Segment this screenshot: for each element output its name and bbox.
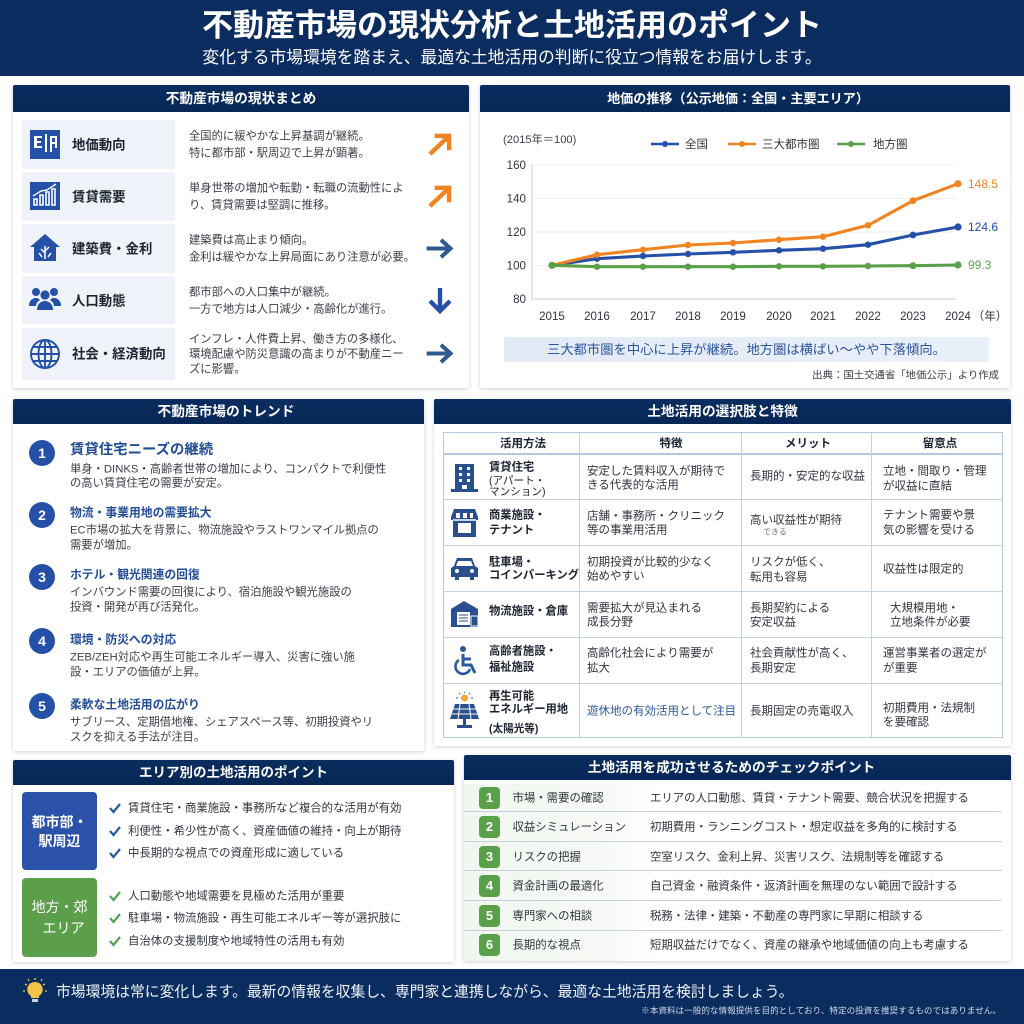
description	[189, 130, 370, 160]
source note: 出典：国土交通省「地価公示」より作成	[812, 370, 999, 381]
label: 賃貸需要	[72, 189, 126, 204]
description	[189, 286, 392, 316]
panel heading: points by area	[13, 760, 454, 785]
row: parking: 収益性は限定的	[883, 564, 964, 576]
line chart: 2016	[584, 310, 610, 323]
panel: market summary	[13, 85, 469, 388]
row: renewable energy: エネルギー用地	[489, 704, 568, 716]
checkpoint 4: 自己資金・融資条件・返済計画を無理のない範囲で設計する	[650, 881, 958, 893]
row: elderly care: が重要	[883, 663, 918, 675]
description: 単身世帯の増加や転勤・転職の流動性によ	[189, 183, 404, 195]
header banner	[0, 0, 1024, 76]
check list: regional: 駐車場・物流施設・再生可能エネルギー等が選択肢に	[128, 913, 401, 925]
line chart: 2018	[675, 310, 701, 323]
trend 5: スクを抑える手法が注目。	[70, 732, 205, 744]
check list: urban: 中長期的な視点での資産形成に適している	[128, 848, 344, 860]
line chart: 124.6	[968, 220, 998, 234]
row: rental housing: マンション)	[489, 486, 546, 498]
row: rental housing	[444, 455, 1002, 500]
checkpoint 5	[464, 901, 1002, 931]
label box: regional	[22, 878, 97, 957]
row: parking: 始めやすい	[587, 571, 644, 583]
description: インフレ・人件費上昇、働き方の多様化、	[189, 334, 403, 346]
row: renewable energy: を要確認	[883, 717, 929, 729]
checkpoint 4: 4	[486, 878, 493, 893]
checkpoint 1: エリアの人口動態、賃貸・テナント需要、競合状況を把握する	[650, 793, 969, 805]
row: commercial: テナント	[489, 525, 534, 537]
legend	[651, 137, 908, 151]
description	[189, 182, 404, 212]
checkpoint 1	[464, 784, 1002, 812]
group: urban	[22, 792, 401, 870]
description: 特に都市部・駅周辺で上昇が顕著。	[189, 148, 370, 160]
checkpoint 2: 2	[486, 819, 493, 834]
trend 4	[29, 628, 355, 679]
panel heading: market trends: 不動産市場のトレンド	[158, 404, 294, 419]
row: elderly care: 高齢化社会により需要が	[587, 648, 713, 660]
trend 3: 3	[38, 569, 46, 585]
panel heading: land price trend	[480, 85, 1010, 112]
line chart: 2015	[539, 310, 565, 323]
panel heading: points by area: エリア別の土地活用のポイント	[139, 765, 328, 780]
series: regional	[548, 261, 962, 270]
icon: warehouse	[451, 601, 478, 627]
table header row: 留意点	[923, 438, 957, 450]
label: 建築費・金利	[72, 241, 152, 256]
checkpoint 1: 市場・需要の確認	[512, 793, 604, 805]
description: 環境配慮や防災意識の高まりが不動産ニー	[189, 349, 404, 361]
checkpoint 6	[464, 931, 1002, 961]
label: 社会・経済動向	[72, 346, 166, 361]
arrow: up right	[428, 134, 452, 156]
trend 3: 投資・開発が再び活発化。	[70, 602, 206, 614]
trend 1	[29, 440, 386, 490]
checkpoint 2: 収益シミュレーション	[512, 822, 626, 834]
callout: chart summary	[504, 337, 989, 362]
subtitle: 変化する市場環境を踏まえ、最適な土地活用の判断に役立つ情報をお届けします。	[202, 48, 822, 67]
row: population	[22, 276, 452, 324]
trend 2	[29, 502, 379, 552]
table header row	[444, 433, 1002, 455]
checkpoint 3: 空室リスク、金利上昇、災害リスク、法規制等を確認する	[650, 852, 944, 864]
check list: regional: 自治体の支援制度や地域特性の活用も有効	[128, 936, 344, 948]
trend 3	[29, 564, 352, 614]
checkpoint 5: 専門家への相談	[512, 911, 592, 923]
panel heading: success checkpoints: 土地活用を成功させるためのチェックポイント	[588, 760, 875, 775]
line chart: 160	[507, 159, 526, 172]
check list: regional	[109, 890, 401, 948]
check list: urban	[109, 802, 401, 860]
check list: urban: 利便性・希少性が高く、資産価値の維持・向上が期待	[128, 826, 401, 838]
checkpoint 6: 6	[486, 937, 493, 952]
row: commercial: 気の影響を受ける	[883, 525, 975, 537]
legend: 三大都市圏	[762, 137, 820, 151]
trend 2: 2	[38, 507, 46, 523]
footer message: 市場環境は常に変化します。最新の情報を収集し、専門家と連携しながら、最適な土地活用を検討しましょう。	[56, 984, 793, 1000]
checkpoint 3	[464, 842, 1002, 871]
row: logistics: 長期契約による	[750, 603, 830, 615]
table header row: 活用方法	[500, 438, 546, 450]
row: parking: コインパーキング	[489, 570, 579, 582]
check list: urban: 賃貸住宅・商業施設・事務所など複合的な活用が有効	[128, 803, 401, 815]
panel heading: market trends	[13, 399, 424, 424]
panel: market trends	[13, 399, 424, 751]
line chart: （年）	[973, 309, 1007, 323]
icon: storefront	[451, 509, 478, 537]
trend 2: 物流・事業用地の需要拡大	[70, 505, 212, 519]
row: commercial: テナント需要や景	[883, 510, 975, 522]
label: 地価動向	[72, 137, 126, 152]
line chart: 2019	[720, 310, 746, 323]
panel heading: market summary	[13, 85, 469, 112]
table header row: 特徴	[660, 438, 682, 450]
checkpoint 4: 資金計画の最適化	[512, 881, 604, 893]
row: land price	[22, 120, 452, 169]
row: logistics: 安定収益	[750, 617, 796, 629]
footer banner	[0, 969, 1024, 1024]
table header row: メリット	[785, 438, 831, 450]
arrow: up right	[428, 186, 452, 208]
panel heading: land price trend: 地価の推移（公示地価：全国・主要エリア）	[607, 91, 869, 106]
line chart	[503, 132, 1007, 323]
row: parking	[444, 546, 1002, 592]
panel heading: success checkpoints	[464, 755, 1011, 780]
trend 5: 5	[38, 698, 46, 714]
row: logistics: 物流施設・倉庫	[489, 606, 568, 618]
check list: regional: 人口動態や地域需要を見極めた活用が重要	[128, 891, 344, 903]
icon: light bulb	[23, 978, 47, 1002]
legend: 地方圏	[873, 137, 908, 151]
description: 一方で地方は人口減少・高齢化が進行。	[189, 304, 392, 316]
checkpoint 6: 短期収益だけでなく、資産の継承や地域価値の向上も考慮する	[650, 940, 969, 952]
row: parking: 初期投資が比較的少なく	[587, 557, 714, 569]
icon: people	[29, 288, 61, 310]
row: logistics: 立地条件が必要	[890, 617, 970, 629]
panel heading: land use options: 土地活用の選択肢と特徴	[647, 404, 798, 419]
panel heading: land use options	[434, 399, 1011, 424]
line chart: 140	[507, 192, 526, 206]
line chart: 2022	[855, 310, 881, 323]
trend 4: ZEB/ZEH対応や再生可能エネルギー導入、災害に強い施	[70, 652, 355, 664]
icon: car	[451, 558, 478, 580]
row: renewable energy: 再生可能	[489, 691, 534, 703]
row: rental housing: (アパート・	[489, 475, 545, 487]
label box: urban	[22, 792, 97, 870]
callout: chart summary: 三大都市圏を中心に上昇が継続。地方圏は横ばい〜やや下落傾向。	[547, 342, 946, 357]
label box: urban: 駅周辺	[38, 833, 80, 849]
row: logistics: 成長分野	[587, 617, 633, 629]
row: elderly care: 社会貢献性が高く、	[750, 648, 854, 660]
label box: regional: 地方・郊	[32, 899, 88, 915]
group: regional	[22, 878, 401, 957]
row: elderly care: 福祉施設	[489, 662, 534, 674]
description	[189, 234, 415, 264]
icon: wheelchair	[454, 646, 476, 676]
row: elderly care: 拡大	[587, 663, 610, 675]
checkpoint 2	[464, 812, 1002, 842]
icon: bar chart	[30, 182, 60, 210]
arrow: down	[428, 288, 452, 314]
trend 4: 環境・防災への対応	[70, 632, 176, 646]
row: logistics: 需要拡大が見込まれる	[587, 603, 702, 615]
panel: land use options	[434, 399, 1011, 746]
title: 不動産市場の現状分析と土地活用のポイント	[202, 8, 822, 43]
trend 1: 賃貸住宅ニーズの継続	[70, 442, 213, 458]
row: commercial: 高い収益性が期待	[750, 515, 842, 527]
row: rental demand	[22, 172, 452, 221]
row: commercial	[444, 500, 1002, 546]
label box: regional: エリア	[42, 920, 84, 936]
panel: land price trend	[480, 85, 1010, 388]
trend 4: 4	[38, 633, 46, 649]
checkpoint 5: 税務・法律・建築・不動産の専門家に早期に相談する	[650, 911, 923, 923]
description: 金利は緩やかな上昇局面にあり注意が必要。	[189, 252, 415, 264]
checkpoint 1: 1	[486, 790, 493, 805]
row: rental housing: 安定した賃料収入が期待で	[587, 466, 725, 478]
row: renewable energy: 長期固定の売電収入	[750, 706, 854, 718]
line chart: 99.3	[968, 258, 992, 272]
trend 2: EC市場の拡大を背景に、物流施設やラストワンマイル拠点の	[70, 525, 379, 537]
arrow: right	[426, 238, 454, 259]
checkpoint 3: リスクの把握	[512, 852, 581, 864]
trend 4: 設・エリアの価値が上昇。	[70, 667, 206, 679]
icon: globe	[30, 339, 60, 369]
row: logistics	[444, 592, 1002, 638]
checkpoint 5: 5	[486, 908, 493, 923]
row: renewable energy: 初期費用・法規制	[883, 703, 975, 715]
trend 1: の高い賃貸住宅の需要が安定。	[70, 478, 228, 490]
panel: success checkpoints	[464, 755, 1011, 961]
row: social and economic	[22, 328, 454, 380]
line chart: 100	[507, 260, 526, 272]
line chart: 2017	[630, 310, 656, 323]
arrow: right	[426, 343, 454, 364]
trend 5: サブリース、定期借地権、シェアスペース等、初期投資やリ	[70, 717, 373, 729]
legend: 全国	[685, 137, 708, 151]
row: elderly care: 長期安定	[750, 663, 796, 675]
row: elderly care	[444, 638, 1002, 684]
trend 5: 柔軟な土地活用の広がり	[70, 697, 200, 711]
description: 全国的に緩やかな上昇基調が継続。	[189, 131, 370, 143]
checkpoint 4	[464, 871, 1002, 901]
panel: points by area	[13, 760, 454, 962]
description: 建築費は高止まり傾向。	[189, 235, 313, 247]
row: renewable energy: 遊休地の有効活用として注目	[587, 706, 736, 718]
trend 1: 1	[38, 445, 46, 461]
series: three metro areas	[552, 180, 962, 265]
row: logistics: 大規模用地・	[890, 603, 959, 615]
line chart: 2023	[900, 310, 926, 323]
line chart: 80	[513, 293, 526, 306]
description	[189, 332, 404, 376]
row: parking: リスクが低く、	[750, 557, 830, 569]
row: parking: 転用も容易	[750, 572, 808, 584]
row: rental housing: きる代表的な活用	[587, 480, 679, 492]
panel heading: market summary: 不動産市場の現状まとめ	[166, 91, 316, 106]
row: commercial: 店舗・事務所・クリニック	[587, 511, 725, 523]
description: り、賃貸需要は堅調に推移。	[189, 200, 335, 212]
trend 5	[29, 693, 373, 744]
trend 3: インバウンド需要の回復により、宿泊施設や観光施設の	[70, 587, 352, 599]
series: national	[552, 223, 962, 265]
row: renewable energy: (太陽光等)	[489, 723, 538, 735]
row: rental housing: が収益に直結	[883, 481, 952, 493]
line chart: (2015年＝100)	[503, 132, 577, 146]
row: elderly care: 高齢者施設・	[489, 646, 557, 658]
line chart: 2021	[810, 310, 836, 323]
row: elderly care: 運営事業者の選定が	[883, 648, 986, 660]
label: 人口動態	[72, 293, 126, 308]
line chart: 148.5	[968, 177, 998, 191]
row: commercial: 等の事業用活用	[587, 525, 668, 537]
trend 1: 単身・DINKS・高齢者世帯の増加により、コンパクトで利便性	[70, 464, 386, 476]
icon: house	[30, 234, 60, 261]
checkpoint 2: 初期費用・ランニングコスト・想定収益を多角的に検討する	[650, 822, 958, 834]
row: commercial: できる	[763, 528, 787, 537]
row: construction cost and interest	[22, 224, 454, 273]
description: 都市部への人口集中が継続。	[189, 287, 336, 299]
line chart: 2020	[766, 310, 792, 323]
description: ズに影響。	[189, 364, 246, 376]
table	[443, 432, 1003, 738]
line chart: 2024	[945, 310, 971, 323]
checkpoint 6: 長期的な視点	[512, 940, 581, 952]
icon: buildings	[30, 130, 60, 159]
row: rental housing: 賃貸住宅	[489, 462, 534, 474]
row: renewable energy	[450, 690, 975, 735]
disclaimer: ※本資料は一般的な情報提供を目的としており、特定の投資を推奨するものではありません。	[641, 1005, 1001, 1015]
checkpoint 3: 3	[486, 849, 493, 864]
row: parking: 駐車場・	[489, 557, 534, 569]
row: commercial: 商業施設・	[489, 510, 546, 522]
trend 2: 需要が増加。	[70, 540, 138, 552]
trend 3: ホテル・観光関連の回復	[70, 567, 200, 581]
line chart: 120	[507, 226, 526, 239]
icon: solar panel	[450, 692, 479, 728]
label box: urban: 都市部・	[32, 814, 88, 830]
icon: apartment	[451, 464, 478, 492]
row: rental housing: 長期的・安定的な収益	[750, 471, 865, 483]
row: rental housing: 立地・間取り・管理	[883, 466, 986, 478]
